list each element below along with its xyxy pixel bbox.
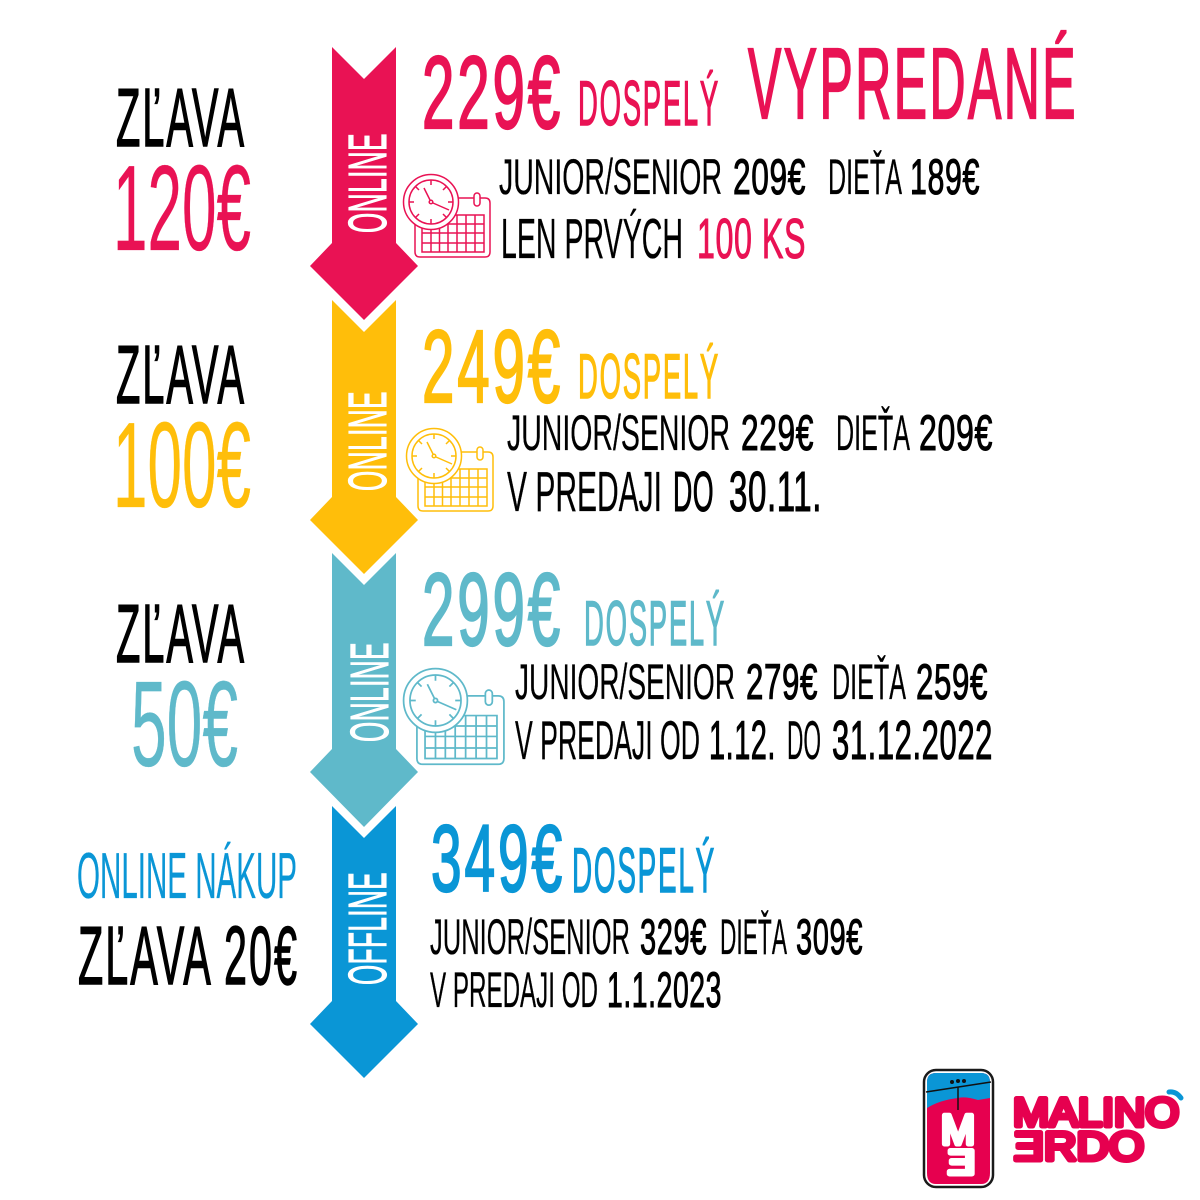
- tier 1: prices: LEN PRVÝCH: [501, 207, 683, 271]
- arrow: offline blue: [310, 806, 418, 1078]
- tier 1: prices: 209€: [733, 149, 806, 205]
- tier 2: prices: DIEŤA: [836, 405, 910, 461]
- tier 1: discount 120: [113, 71, 251, 276]
- tier 4: prices: 1.1.2023: [607, 962, 722, 1018]
- arrow: online teal: ONLINE: [340, 642, 400, 742]
- tier 4: prices: V PREDAJI OD: [430, 962, 598, 1018]
- tier 2: prices: JUNIOR/SENIOR: [507, 405, 730, 461]
- tier 3: prices: 299€: [422, 552, 563, 667]
- tier 3: prices: DOSPELÝ: [584, 589, 726, 659]
- logo wordmark: [1013, 1091, 1181, 1169]
- tier 2: prices: V PREDAJI: [507, 460, 662, 524]
- tier 3: prices: V PREDAJI OD: [515, 709, 700, 771]
- tier 1: prices: [422, 28, 1078, 271]
- tier 3: prices: 1.12.: [709, 709, 776, 771]
- tier 2: prices: 249€: [422, 309, 563, 424]
- tier 4: prices: 309€: [796, 909, 863, 965]
- tier 2: prices: 209€: [919, 405, 993, 461]
- text: ZĽAVA: [116, 328, 246, 421]
- tier 4: prices: JUNIOR/SENIOR: [430, 909, 630, 965]
- tier 4: prices: [430, 806, 863, 1018]
- tier 3: prices: DIEŤA: [832, 654, 906, 710]
- arrow: online pink: ONLINE: [338, 133, 398, 233]
- tier 4: prices: 329€: [640, 909, 707, 965]
- tier 2: prices: DO: [673, 460, 714, 524]
- tier 3: prices: JUNIOR/SENIOR: [515, 654, 735, 710]
- text: ZĽAVA: [116, 71, 246, 164]
- tier 2: prices: DOSPELÝ: [578, 342, 720, 412]
- tier 4: prices: 349€: [431, 806, 565, 912]
- tier 3: prices: DO: [787, 709, 821, 771]
- tier 3: prices: 31.12.2022: [832, 709, 993, 771]
- tier 1: prices: DIEŤA: [828, 149, 902, 205]
- tier 1: prices: DOSPELÝ: [578, 69, 720, 139]
- logo wordmark: MALINO: [1013, 1091, 1179, 1135]
- logo wordmark: ƎRDO: [1014, 1125, 1144, 1169]
- text: ZĽAVA: [116, 587, 246, 680]
- tier 2: prices: 229€: [741, 405, 814, 461]
- text: ZĽAVA 20€: [78, 909, 299, 1002]
- tier 3: prices: 279€: [746, 654, 818, 710]
- tier 3: discount 50: [116, 587, 246, 792]
- icon: clock and calendar pink: [404, 174, 490, 257]
- logo badge: M: [941, 1106, 975, 1153]
- text: ONLINE NÁKUP: [77, 839, 297, 912]
- tier 2: prices: [422, 309, 993, 524]
- icon: clock and calendar yellow: [406, 428, 493, 511]
- tier 4: prices: DOSPELÝ: [572, 836, 716, 906]
- tier 1: discount 120: 120€: [113, 140, 251, 276]
- tier 4: prices: DIEŤA: [720, 909, 787, 965]
- tier 2: discount 100: 100€: [113, 397, 251, 533]
- arrow: online teal: [310, 553, 418, 827]
- logo badge: [924, 1070, 993, 1187]
- arrow: online pink: [310, 47, 418, 320]
- arrow: online yellow: [310, 300, 418, 574]
- tier 3: prices: 259€: [916, 654, 988, 710]
- tier 2: discount 100: [113, 328, 251, 533]
- tier 1: prices: 229€: [422, 35, 563, 150]
- tier 3: discount 50: 50€: [131, 656, 238, 792]
- tier 1: prices: JUNIOR/SENIOR: [499, 149, 722, 205]
- icon: clock and calendar teal: [404, 669, 504, 764]
- tier 2: prices: 30.11.: [729, 460, 822, 524]
- tier 1: prices: 100 KS: [697, 207, 806, 271]
- tier 4: offline discount: [77, 839, 299, 1002]
- arrow: offline blue: OFFLINE: [338, 872, 398, 985]
- arrow: online yellow: ONLINE: [338, 391, 398, 491]
- logo badge: Ǝ: [948, 1144, 975, 1182]
- tier 1: prices: 189€: [910, 149, 980, 205]
- tier 3: prices: [422, 552, 993, 771]
